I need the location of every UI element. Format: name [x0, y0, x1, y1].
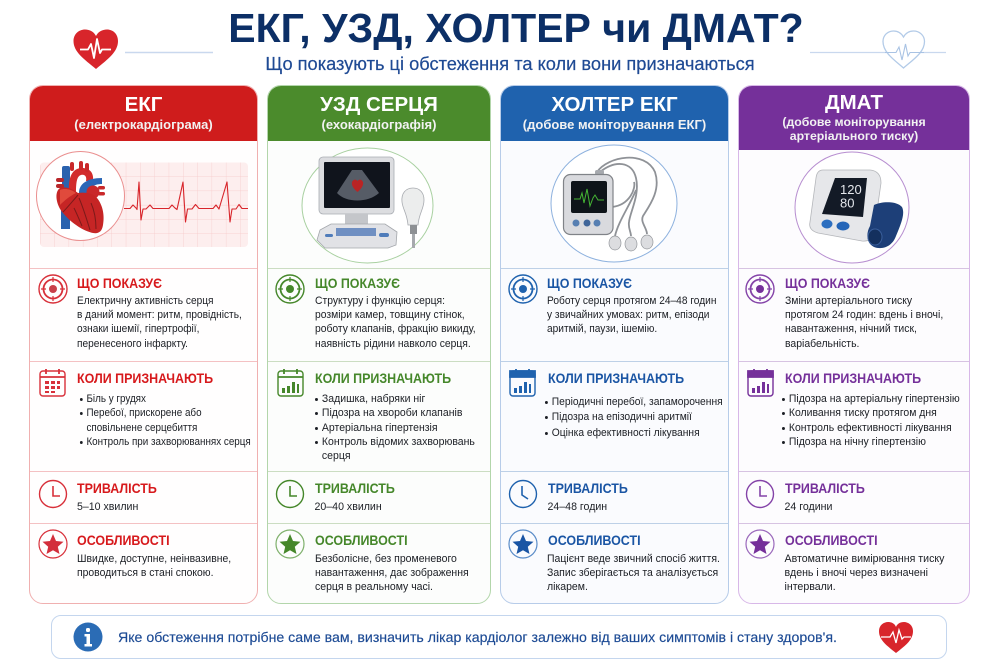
icon: star: [275, 529, 305, 559]
illustration: blood pressure monitor: 80: [840, 196, 854, 210]
icon: star: [745, 529, 775, 559]
section: УЗД коли призначають: Контроль відомих захворювань: [322, 436, 475, 448]
section: Холтер тривалість: ТРИВАЛІСТЬ: [548, 480, 627, 496]
section: ЕКГ коли призначають: Контроль при захворюваннях серця: [86, 436, 251, 448]
panel header: ЕКГ: (електрокардіограма): [74, 117, 213, 132]
panel header: ЕКГ: [29, 85, 258, 141]
section: ДМАТ коли призначають: Підозра на нічну гіпертензію: [789, 436, 926, 448]
section: Холтер що показує: у звичайних умовах: ритм, епізоди: [547, 309, 709, 321]
section: ЕКГ коли призначають: Біль у грудях: [86, 393, 146, 405]
section: Холтер тривалість: [508, 480, 628, 513]
section: ДМАТ тривалість: ТРИВАЛІСТЬ: [784, 480, 864, 496]
section: ДМАТ що показує: варіабельність.: [784, 338, 859, 350]
section: ДМАТ особливості: вдень і вночі через визначені: [784, 567, 928, 579]
section: Холтер тривалість: 24–48 годин: [548, 501, 607, 513]
section: ЕКГ коли призначають: [39, 369, 251, 448]
section: ЕКГ особливості: ОСОБЛИВОСТІ: [77, 532, 170, 548]
icon: outline heart with pulse line: [810, 30, 946, 69]
section: ЕКГ що показує: [38, 274, 242, 350]
section: ЕКГ тривалість: 5–10 хвилин: [77, 501, 138, 513]
section: УЗД коли призначають: Підозра на хвороби клапанів: [322, 407, 462, 419]
section: УЗД що показує: ЩО ПОКАЗУЄ: [314, 275, 400, 291]
section: ДМАТ особливості: ОСОБЛИВОСТІ: [784, 532, 877, 548]
section: ДМАТ коли призначають: Контроль ефективності лікування: [789, 422, 952, 434]
section: Холтер особливості: ОСОБЛИВОСТІ: [548, 532, 640, 548]
section: ДМАТ що показує: Зміни артеріального тиску: [784, 295, 912, 307]
section: УЗД особливості: Безболісне, без променевого: [314, 552, 456, 564]
section: Холтер особливості: лікарем.: [547, 581, 588, 593]
icon: target: [275, 274, 305, 304]
section: ДМАТ що показує: [745, 274, 943, 350]
section: ДМАТ коли призначають: Коливання тиску протягом дня: [789, 407, 937, 419]
section: ЕКГ що показує: ознаки ішемії, гіпертрофії,: [77, 323, 199, 335]
panel header: ДМАТ: [738, 85, 970, 150]
panel: ДМАТ: [738, 85, 970, 604]
section: Холтер коли призначають: КОЛИ ПРИЗНАЧАЮТЬ: [548, 370, 684, 386]
panel header: Холтер ЕКГ: [500, 85, 729, 141]
section: УЗД тривалість: ТРИВАЛІСТЬ: [314, 480, 394, 496]
section: УЗД коли призначають: серця: [322, 450, 351, 462]
panel header: ДМАТ: артеріального тиску): [790, 129, 918, 143]
section: ДМАТ тривалість: 24 години: [784, 501, 832, 513]
section: УЗД що показує: Структуру і функцію серця:: [314, 295, 444, 307]
section: ДМАТ що показує: навантаження, нічний тиск,: [784, 323, 916, 335]
icon: calendar: [39, 369, 66, 397]
section: УЗД коли призначають: [277, 369, 475, 462]
icon: target: [38, 274, 68, 304]
panel header: Холтер ЕКГ: ХОЛТЕР ЕКГ: [551, 92, 678, 116]
section: Холтер особливості: Пацієнт веде звичний спосіб життя.: [547, 552, 720, 564]
section: ДМАТ коли призначають: КОЛИ ПРИЗНАЧАЮТЬ: [784, 370, 921, 386]
section: ЕКГ що показує: ЩО ПОКАЗУЄ: [77, 275, 162, 291]
section: Холтер що показує: аритмій, паузи, ішемію.: [547, 323, 657, 335]
section: Холтер коли призначають: [509, 369, 722, 439]
section: УЗД тривалість: [276, 480, 394, 513]
icon: calendar: [277, 369, 304, 397]
illustration: ultrasound machine: [302, 148, 434, 264]
section: ДМАТ що показує: протягом 24 годин: вдень і вночі,: [784, 309, 943, 321]
section: УЗД що показує: [275, 274, 475, 350]
section: ДМАТ особливості: Автоматичне вимірювання тиску: [784, 552, 944, 564]
icon: clock: [508, 480, 538, 508]
panel header: УЗД серця: [267, 85, 491, 141]
section: УЗД особливості: ОСОБЛИВОСТІ: [314, 532, 407, 548]
section: УЗД тривалість: 20–40 хвилин: [314, 501, 382, 513]
section: Холтер коли призначають: Періодичні перебої, запаморочення: [551, 396, 722, 408]
section: УЗД особливості: [275, 529, 468, 593]
section: УЗД що показує: розміри камер, товщину стінок,: [314, 309, 464, 321]
illustration: heart with ECG trace: [36, 151, 248, 247]
callout: footer note: [51, 615, 947, 659]
icon: star: [508, 529, 538, 559]
icon: calendar: [509, 369, 536, 397]
section: ЕКГ коли призначають: Перебої, прискорене або: [86, 407, 202, 419]
panel header: Холтер ЕКГ: (добове моніторування ЕКГ): [523, 117, 706, 132]
panel: УЗД серця: [267, 85, 491, 604]
icon: target: [508, 274, 538, 304]
panel: ЕКГ: [29, 85, 258, 604]
icon: clock: [746, 480, 774, 508]
section: ЕКГ що показує: перенесеного інфаркту.: [77, 338, 188, 350]
illustration: blood pressure monitor: 120: [840, 182, 862, 197]
section: Холтер коли призначають: Оцінка ефективності лікування: [551, 427, 699, 439]
panel header: УЗД серця: УЗД СЕРЦЯ: [320, 92, 438, 116]
section: Холтер що показує: ЩО ПОКАЗУЄ: [547, 275, 632, 291]
section: ЕКГ особливості: проводиться в стані спокою.: [77, 567, 213, 579]
icon: calendar: [747, 369, 774, 397]
section: ДМАТ особливості: інтервали.: [784, 581, 836, 593]
section: ЕКГ особливості: Швидке, доступне, неінвазивне,: [77, 552, 231, 564]
section: ДМАТ що показує: ЩО ПОКАЗУЄ: [784, 275, 870, 291]
section: ЕКГ коли призначають: сповільнене серцебиття: [86, 422, 197, 434]
section: ДМАТ коли призначають: [747, 369, 960, 448]
section: ЕКГ особливості: [38, 529, 231, 579]
icon: info: [74, 622, 102, 652]
section: Холтер що показує: Роботу серця протягом 24–48 годин: [547, 295, 716, 307]
section: ЕКГ тривалість: [38, 480, 157, 513]
icon: clock: [276, 480, 304, 508]
illustration: Holter monitor: [550, 144, 678, 262]
section: ДМАТ коли призначають: Підозра на артеріальну гіпертензію: [789, 393, 960, 405]
section: УЗД особливості: серця в реальному часі.: [314, 581, 432, 593]
panel header: ДМАТ: ДМАТ: [825, 90, 883, 114]
section: УЗД коли призначають: Артеріальна гіпертензія: [322, 422, 438, 434]
section: Холтер особливості: Запис зберігається та аналізується: [547, 567, 718, 579]
subtitle: Що показують ці обстеження та коли вони призначаються: [265, 53, 755, 74]
icon: star: [38, 529, 68, 559]
section: Холтер що показує: [508, 274, 716, 335]
section: ЕКГ що показує: Електричну активність серця: [77, 295, 213, 307]
panel header: УЗД серця: (ехокардіографія): [322, 117, 436, 132]
panel: Холтер ЕКГ: [500, 85, 729, 604]
section: УЗД особливості: навантаження, дає зображення: [314, 567, 468, 579]
panel header: ДМАТ: (добове моніторування: [782, 115, 926, 129]
icon: clock: [38, 480, 68, 508]
icon: target: [745, 274, 775, 304]
section: ЕКГ коли призначають: КОЛИ ПРИЗНАЧАЮТЬ: [77, 370, 213, 386]
footer text: Яке обстеження потрібне саме вам, визначить лікар кардіолог залежно від ваших симптомів і стану здоров'я.: [118, 628, 837, 644]
title: ЕКГ, УЗД, ХОЛТЕР чи ДМАТ?: [228, 5, 804, 51]
section: УЗД коли призначають: КОЛИ ПРИЗНАЧАЮТЬ: [314, 370, 451, 386]
panel header: ЕКГ: ЕКГ: [125, 92, 162, 116]
section: УЗД що показує: наявність рідини навколо серця.: [314, 338, 470, 350]
section: ЕКГ що показує: в даний момент: ритм, провідність,: [77, 309, 242, 321]
section: УЗД що показує: роботу клапанів, фракцію викиду,: [314, 323, 475, 335]
section: УЗД коли призначають: Задишка, набряки ніг: [322, 393, 425, 405]
section: ДМАТ тривалість: [746, 480, 864, 513]
section: Холтер коли призначають: Підозра на епізодичні аритмії: [551, 411, 691, 423]
section: ЕКГ тривалість: ТРИВАЛІСТЬ: [77, 480, 157, 496]
icon: heart: [879, 622, 913, 653]
illustration: blood pressure monitor: [794, 152, 910, 264]
section: Холтер особливості: [508, 529, 720, 593]
icon: red heart logo: [74, 30, 213, 69]
section: ДМАТ особливості: [745, 529, 944, 593]
